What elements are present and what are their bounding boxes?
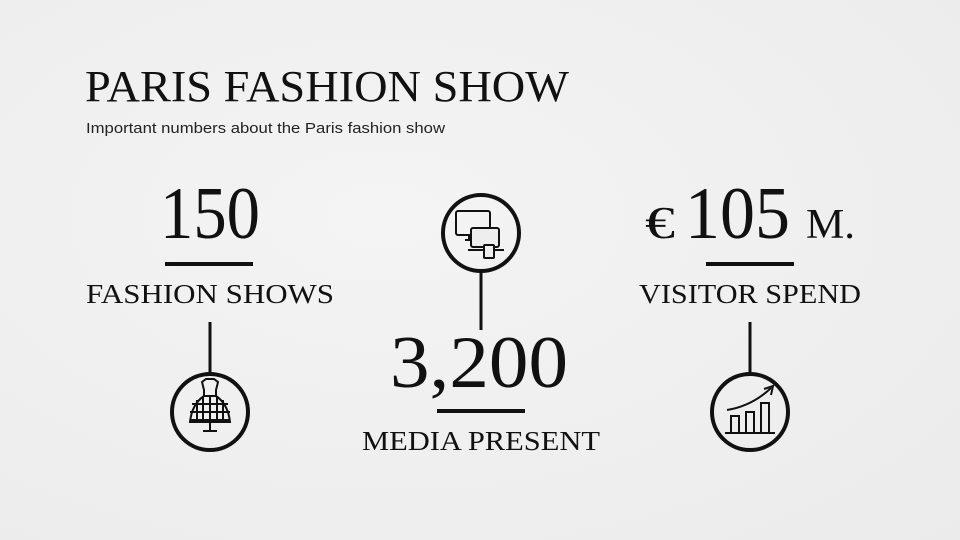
icon: devices	[443, 195, 519, 271]
stat: fashion shows	[86, 173, 334, 450]
subtitle: Important numbers about the Paris fashion show	[86, 121, 446, 137]
stat: visitor spend: M.	[806, 202, 855, 248]
stat: media present	[362, 195, 601, 456]
stat: media present: MEDIA PRESENT	[362, 426, 601, 456]
stat: visitor spend: 105	[685, 173, 790, 255]
stat: visitor spend	[639, 173, 861, 450]
title: PARIS FASHION SHOW	[85, 62, 569, 111]
stat: fashion shows: 150	[160, 173, 260, 255]
stat: visitor spend: €	[645, 197, 675, 248]
stat: media present: 3,200	[390, 322, 568, 404]
stat: visitor spend: VISITOR SPEND	[639, 279, 861, 309]
icon: growth chart	[712, 374, 788, 450]
stat: fashion shows: FASHION SHOWS	[86, 279, 334, 309]
icon: dress form	[172, 374, 248, 450]
